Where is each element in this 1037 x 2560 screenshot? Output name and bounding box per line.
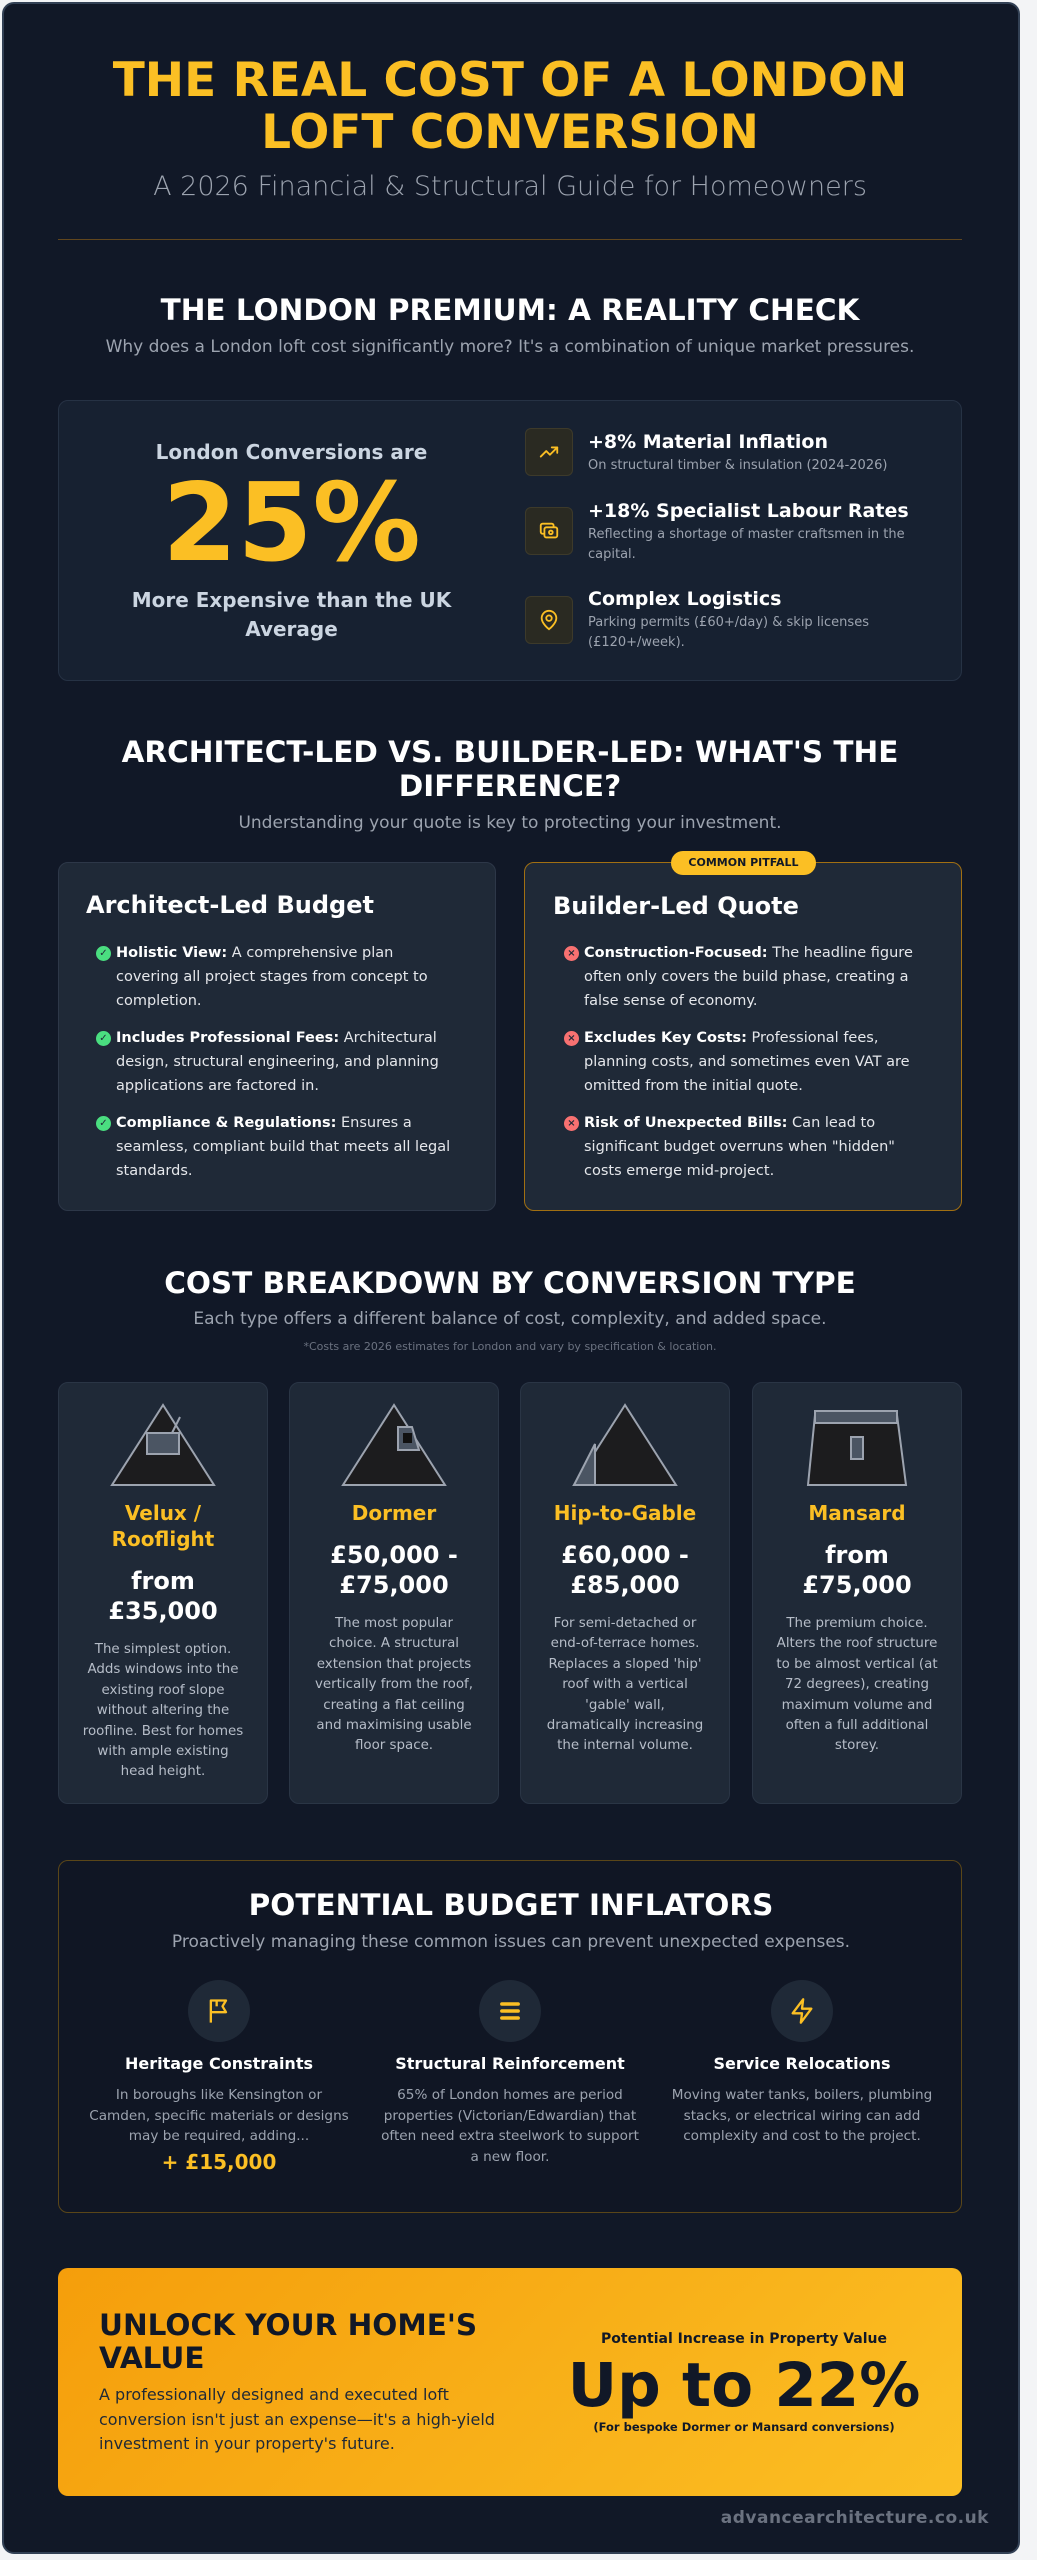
column: heritage: Heritage Constraints xyxy=(125,2054,313,2073)
card: mansard: from xyxy=(825,1541,889,1569)
icon: map pin xyxy=(525,596,573,644)
stat: up to 22% xyxy=(568,2331,920,2434)
card: mansard: The premium choice. Alters the roof structure to be almost vertical (at 72 degrees), creating maximum volume and often a full additional storey. xyxy=(776,1616,938,1753)
stat: 25%: London Conversions are xyxy=(156,440,427,464)
icon: dormer roof xyxy=(341,1403,447,1486)
icon: mansard roof xyxy=(806,1410,908,1486)
note: estimates: *Costs are 2026 estimates for London and vary by specification & location. xyxy=(303,1340,717,1353)
heading: builder-led: Builder-Led Quote xyxy=(553,892,799,920)
column: structural: 65% of London homes are period properties (Victorian/Edwardian) that often need extra steelwork to support a new floor. xyxy=(381,2087,639,2164)
item: holistic: Holistic View: A comprehensive plan covering all project stages from concept to completion. xyxy=(116,945,428,1009)
icon: velux roof xyxy=(110,1403,216,1486)
item: logistics xyxy=(525,588,869,650)
item: material inflation xyxy=(525,428,887,476)
item: compliance: Compliance & Regulations: Ensures a seamless, compliant build that meets all legal standards. xyxy=(116,1115,450,1179)
title xyxy=(112,53,907,160)
item: labour rates: +18% Specialist Labour Rates xyxy=(588,500,909,522)
column: heritage: + £15,000 xyxy=(162,2150,276,2174)
title: THE REAL COST OF A LONDON xyxy=(113,53,907,108)
heading: unlock: UNLOCK YOUR HOME'S xyxy=(99,2308,477,2342)
heading: cost breakdown: COST BREAKDOWN BY CONVERSION TYPE xyxy=(164,1266,856,1300)
stat: up to 22%: Up to 22% xyxy=(568,2350,920,2421)
column: services xyxy=(672,1980,932,2144)
stat: up to 22%: Potential Increase in Property Value xyxy=(601,2331,887,2347)
stat: up to 22%: (For bespoke Dormer or Mansard conversions) xyxy=(593,2420,895,2434)
item: excludes: Excludes Key Costs: Professional fees, planning costs, and sometimes even VAT are omitted from the initial quote. xyxy=(584,1030,910,1094)
subheading: inflators: Proactively managing these common issues can prevent unexpected expenses. xyxy=(172,1932,850,1952)
card: mansard xyxy=(752,1382,962,1804)
item: construction-focused: Construction-Focused: The headline figure often only covers the build phase, creating a false sense of economy. xyxy=(584,945,913,1009)
card: hip-to-gable: £60,000 - xyxy=(561,1541,689,1569)
stat: 25%: Average xyxy=(245,617,338,641)
card: hip-to-gable xyxy=(520,1382,730,1804)
heading: London premium: THE LONDON PREMIUM: A REALITY CHECK xyxy=(161,293,859,327)
icon: money xyxy=(525,507,573,555)
panel: builder-led quote: × xyxy=(567,1033,576,1044)
icon: lightning xyxy=(771,1980,833,2042)
column: heritage: In boroughs like Kensington or Camden, specific materials or designs may be required, adding... xyxy=(89,2087,349,2144)
callout: unlock value xyxy=(58,2268,962,2496)
icon: bars xyxy=(479,1980,541,2042)
item: logistics: Complex Logistics xyxy=(588,588,781,610)
panel: architect-led budget xyxy=(58,862,496,1211)
column: structural: Structural Reinforcement xyxy=(395,2054,625,2073)
panel: architect-led budget: ✓ xyxy=(99,1033,108,1044)
card: velux: £35,000 xyxy=(108,1597,218,1625)
item: risk: Risk of Unexpected Bills: Can lead to significant budget overruns when "hidden" costs emerge mid-project. xyxy=(584,1115,895,1179)
item: material inflation: On structural timber & insulation (2024-2026) xyxy=(588,458,887,473)
card: velux: from xyxy=(131,1567,195,1595)
subheading: architect vs builder: Understanding your quote is key to protecting your investment. xyxy=(238,813,782,833)
card: dormer: Dormer xyxy=(352,1501,436,1525)
subheading: cost breakdown: Each type offers a different balance of cost, complexity, and added space. xyxy=(193,1309,827,1329)
stat: 25%: 25% xyxy=(162,461,421,586)
icon: hip-to-gable roof xyxy=(572,1403,678,1486)
card: velux: The simplest option. Adds windows into the existing roof slope without altering the roofline. Best for homes with ample existing head height. xyxy=(83,1642,243,1779)
title: LOFT CONVERSION xyxy=(261,105,759,160)
card: dormer: £50,000 - xyxy=(330,1541,458,1569)
item: labour rates: Reflecting a shortage of master craftsmen in the capital. xyxy=(588,527,905,562)
card: mansard: £75,000 xyxy=(802,1571,912,1599)
panel: London premium xyxy=(58,400,962,681)
heading: architect-led: Architect-Led Budget xyxy=(86,891,374,919)
heading: architect vs builder: DIFFERENCE? xyxy=(399,769,621,803)
heading: architect vs builder xyxy=(122,735,898,803)
card: mansard: Mansard xyxy=(808,1501,906,1525)
card: velux: Velux / xyxy=(125,1501,201,1525)
panel: budget inflators xyxy=(58,1860,962,2213)
panel: builder-led quote xyxy=(524,862,962,1211)
subheading: London premium: Why does a London loft cost significantly more? It's a combination of unique market pressures. xyxy=(106,337,914,357)
stat: 25% xyxy=(132,440,452,641)
subtitle: A 2026 Financial & Structural Guide for Homeowners xyxy=(153,171,867,202)
item: material inflation: +8% Material Inflation xyxy=(588,431,828,453)
card: velux: Rooflight xyxy=(112,1527,214,1551)
card: velux xyxy=(58,1382,268,1804)
column: services: Service Relocations xyxy=(713,2054,891,2073)
panel: architect-led budget: ✓ xyxy=(99,948,108,959)
card: hip-to-gable: Hip-to-Gable xyxy=(554,1501,696,1525)
card: dormer: £75,000 xyxy=(339,1571,449,1599)
panel: builder-led quote: × xyxy=(567,1118,576,1129)
heading: unlock xyxy=(99,2308,477,2375)
item: fees: Includes Professional Fees: Architectural design, structural engineering, and planning applications are factored in. xyxy=(116,1030,439,1094)
card: hip-to-gable: For semi-detached or end-of-terrace homes. Replaces a sloped 'hip' roof with a vertical 'gable' wall, dramatically increasing the internal volume. xyxy=(547,1616,703,1753)
icon: flag xyxy=(188,1980,250,2042)
card: hip-to-gable: £85,000 xyxy=(570,1571,680,1599)
column: services: Moving water tanks, boilers, plumbing stacks, or electrical wiring can add complexity and cost to the project. xyxy=(672,2087,932,2144)
panel: builder-led quote: × xyxy=(567,948,576,959)
icon: trend xyxy=(525,428,573,476)
badge: common pitfall xyxy=(671,851,816,875)
heading: architect vs builder: ARCHITECT-LED VS. BUILDER-LED: WHAT'S THE xyxy=(122,735,898,769)
item: labour rates xyxy=(525,500,909,562)
heading: unlock: VALUE xyxy=(99,2341,205,2375)
card: dormer: The most popular choice. A structural extension that projects vertically from the roof, creating a flat ceiling and maximising usable floor space. xyxy=(315,1616,473,1753)
card: dormer xyxy=(289,1382,499,1804)
item: logistics: Parking permits (£60+/day) & skip licenses (£120+/week). xyxy=(588,615,869,650)
panel: architect-led budget: ✓ xyxy=(99,1118,108,1129)
text: unlock: A professionally designed and executed loft conversion isn't just an expense—it's a high-yield investment in your property's future. xyxy=(99,2385,495,2453)
column: heritage xyxy=(89,1980,349,2174)
stat: 25%: More Expensive than the UK xyxy=(132,588,451,612)
badge: common pitfall: COMMON PITFALL xyxy=(688,856,799,869)
footer: website: advancearchitecture.co.uk xyxy=(721,2508,989,2528)
heading: inflators: POTENTIAL BUDGET INFLATORS xyxy=(249,1888,773,1922)
column: structural xyxy=(381,1980,639,2164)
